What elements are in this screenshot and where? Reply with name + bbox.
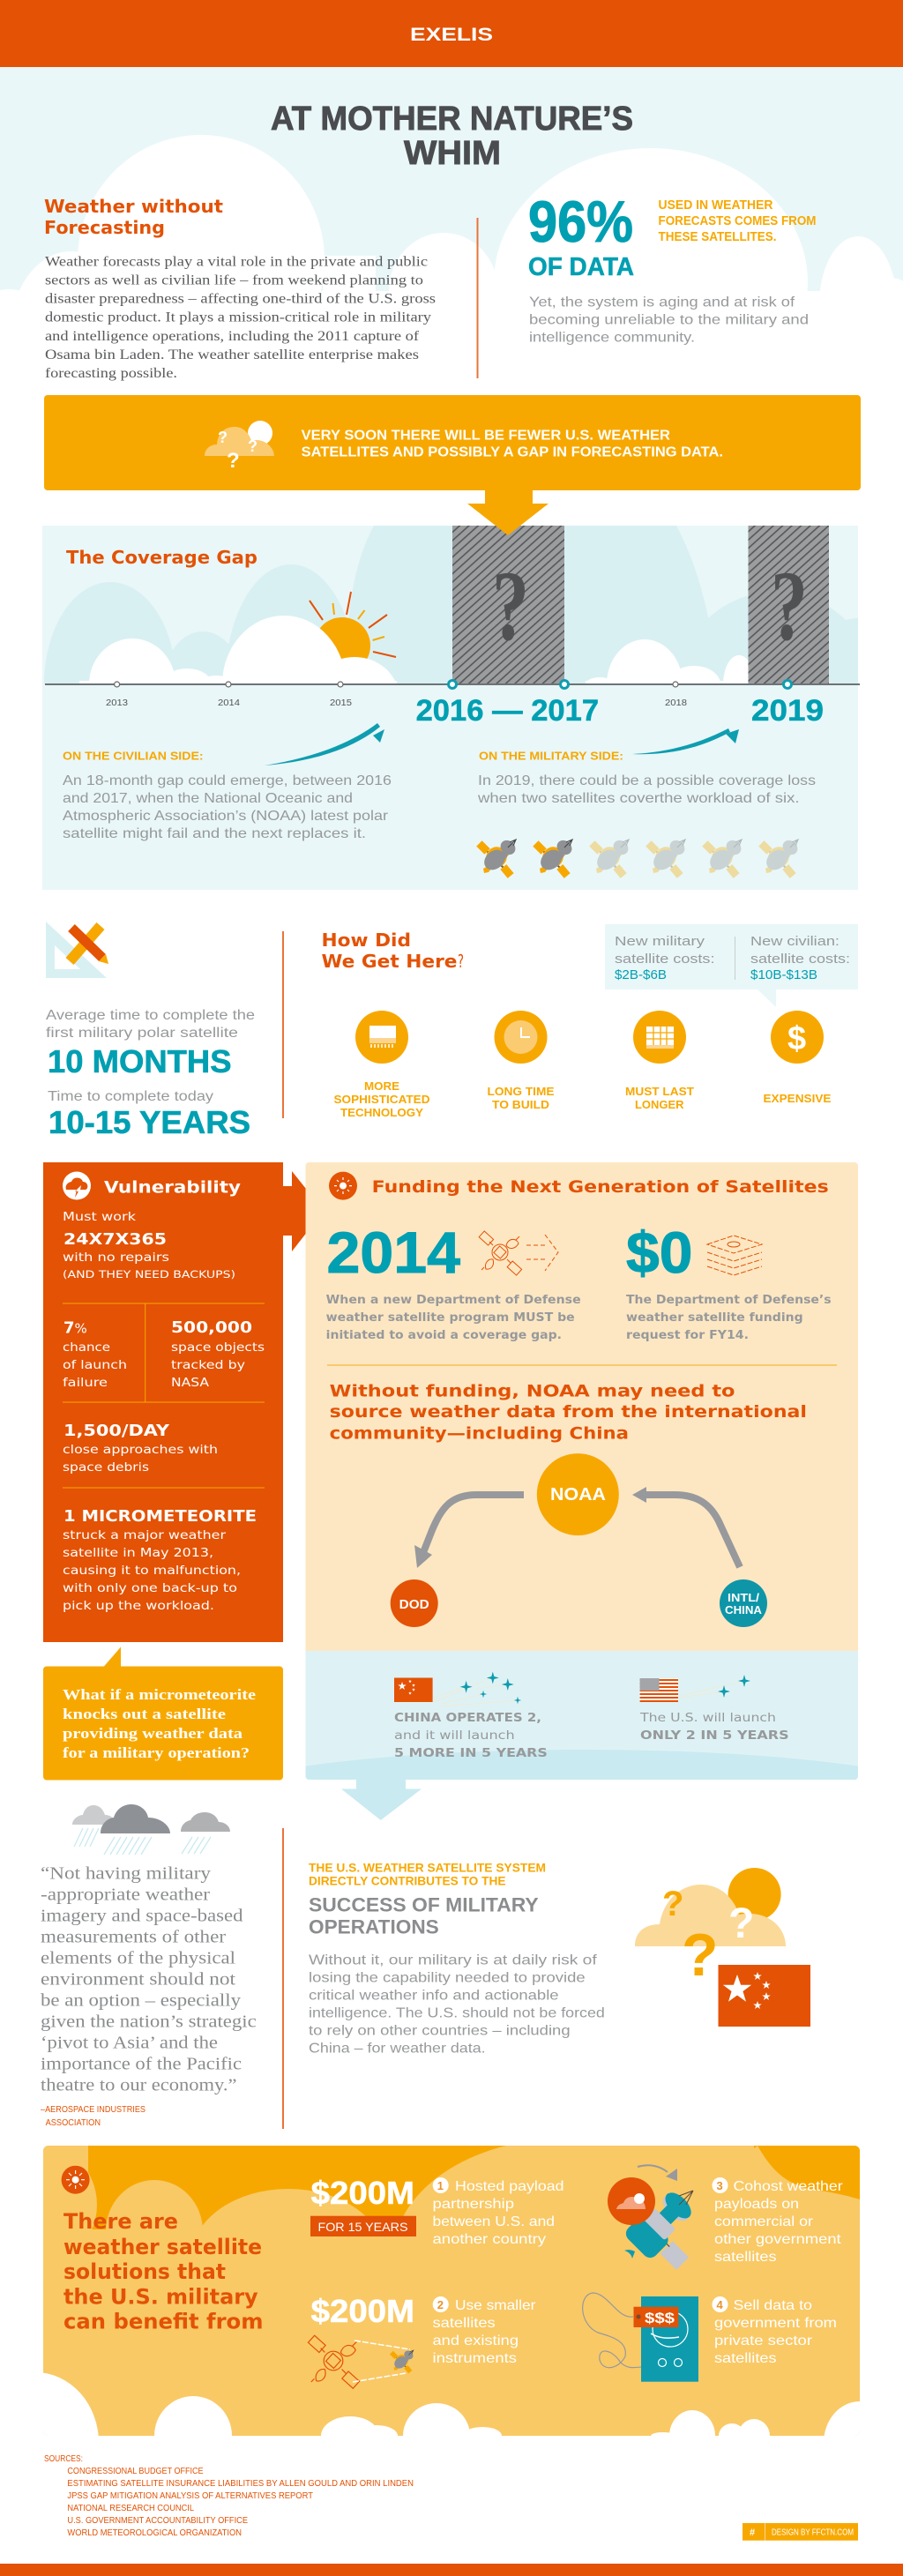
banner: fewer satellites: [44, 395, 861, 535]
solution 4: government from: [714, 2316, 837, 2331]
solution 2: and existing: [432, 2333, 519, 2348]
panel: vulnerability: [43, 1162, 324, 1642]
icon: launch stars: [679, 1675, 750, 1698]
item: must last longer: [625, 1011, 694, 1111]
quote: imagery and space-based: [41, 1908, 243, 1926]
subheading: community—including China: [330, 1423, 629, 1443]
how did we get here: [321, 924, 858, 1119]
node: Intl/China: INTL/: [728, 1591, 759, 1604]
node: NOAA: NOAA: [550, 1485, 606, 1505]
success of military operations: THE U.S. WEATHER SATELLITE SYSTEM: [309, 1861, 546, 1875]
coverage gap panel: [42, 526, 903, 890]
callout: micrometeorite question: knocks out a satellite: [63, 1706, 227, 1722]
panel: launch comparison: [305, 1651, 858, 1820]
solution 1: FOR 15 YEARS: [317, 2220, 407, 2234]
item: more sophisticated technology: TECHNOLOGY: [340, 1106, 423, 1119]
timeline: 2015: [330, 698, 352, 708]
quote: given the nation’s strategic: [41, 2013, 257, 2032]
callout: costs: $10B-$13B: [750, 968, 817, 982]
civilian side text: satellite might fail and the next replaces it.: [63, 826, 366, 841]
icon: storm cloud: [63, 1171, 91, 1199]
quote: ‘pivot to Asia’ and the: [41, 2035, 218, 2053]
stat: 24x7x365: (AND THEY NEED BACKUPS): [63, 1268, 235, 1281]
white clouds: [43, 2372, 860, 2436]
stat: micrometeorite: satellite in May 2013,: [63, 1546, 213, 1560]
build time stats: [46, 1008, 255, 1140]
civilian side text: An 18-month gap could emerge, between 2016: [63, 773, 392, 788]
icon: price tag: $$$: [645, 2310, 675, 2326]
gap column 2016-2017: ?: [492, 551, 529, 661]
node: NOAA: [537, 1453, 619, 1535]
icon: large to small satellite: [308, 2335, 414, 2388]
diagram: data flow: [391, 1453, 767, 1627]
quote: measurements of other: [41, 1929, 227, 1947]
stat: 96% of data: becoming unreliable to the military and: [529, 312, 809, 327]
solution 4: private sector: [714, 2333, 813, 2348]
gap column 2016-2017: [452, 526, 564, 684]
node: DoD: [391, 1579, 438, 1627]
attribution: [41, 2104, 146, 2128]
arrow: civilian: [265, 723, 384, 765]
attribution: –AEROSPACE INDUSTRIES: [41, 2104, 146, 2115]
us launches: ONLY 2 IN 5 YEARS: [640, 1729, 789, 1743]
header bar: [0, 0, 903, 67]
icon: cloud with question marks: [205, 421, 274, 473]
intro: weather without forecasting: [44, 196, 436, 381]
body text: forecasting possible.: [45, 366, 177, 381]
china launches: and it will launch: [394, 1729, 515, 1743]
body text: Osama bin Laden. The weather satellite enterprise makes: [45, 347, 419, 362]
arrow: NOAA to DoD: [414, 1495, 524, 1568]
quote: theatre to our economy.”: [41, 2077, 236, 2095]
sources: NATIONAL RESEARCH COUNCIL: [67, 2503, 194, 2513]
logo: Exelis: EXELIS: [410, 25, 493, 45]
military side text: [477, 750, 816, 806]
heading: Vulnerability: [104, 1178, 242, 1198]
title: AT MOTHER NATURE’S: [271, 101, 633, 138]
civilian side text: [63, 750, 392, 841]
icons: six satellites, two active: [476, 837, 801, 878]
icon: us flag: [640, 1678, 678, 1702]
background shapes: [43, 2146, 860, 2436]
icon: price tag: [583, 2293, 698, 2382]
stat: close approaches: [63, 1422, 218, 1475]
body text: Weather forecasts play a vital role in the private and public: [45, 255, 428, 270]
stat: micrometeorite: 1 MICROMETEORITE: [63, 1507, 257, 1526]
item: more sophisticated technology: [333, 1011, 430, 1119]
civilian side text: ON THE CIVILIAN SIDE:: [63, 750, 204, 763]
banner text: VERY SOON THERE WILL BE FEWER U.S. WEATHER: [302, 429, 670, 444]
stat: micrometeorite: struck a major weather: [63, 1528, 227, 1542]
stat: 2014: weather satellite program MUST be: [326, 1310, 575, 1325]
item: must last longer: MUST LAST: [625, 1085, 694, 1098]
callout: costs: [605, 924, 858, 1007]
icon: satellite outline with arrows: [479, 1231, 558, 1275]
callout: costs: $2B-$6B: [615, 968, 667, 982]
build time stats: Average time to complete the: [46, 1008, 255, 1023]
stat: 2014: When a new Department of Defense: [326, 1293, 581, 1307]
icon: cloud, sun, question marks and china flag: ?: [682, 1922, 719, 1989]
icon: cloud, sun, question marks and china flag: ?: [728, 1900, 754, 1947]
sources: U.S. GOVERNMENT ACCOUNTABILITY OFFICE: [67, 2515, 248, 2526]
body text: sectors as well as civilian life – from weekend planning to: [45, 273, 423, 288]
item: expensive: $: [787, 1020, 806, 1057]
china launches: [394, 1672, 548, 1760]
success of military operations: SUCCESS OF MILITARY: [309, 1894, 539, 1916]
node: Intl/China: [720, 1579, 767, 1627]
gap column 2019: [748, 526, 829, 684]
success of military operations: intelligence. The U.S. should not be forced: [309, 2006, 605, 2021]
sky and clouds background: [0, 67, 903, 428]
heading: There are: [63, 2209, 178, 2234]
sources: JPSS GAP MITIGATION ANALYSIS OF ALTERNATIVES REPORT: [67, 2490, 314, 2501]
heading: solutions that: [63, 2259, 226, 2284]
build time stats: 10 MONTHS: [48, 1043, 231, 1079]
body text: and intelligence operations, including the 2011 capture of: [45, 329, 420, 344]
success of military operations: DIRECTLY CONTRIBUTES TO THE: [309, 1874, 506, 1888]
title: WHIM: [404, 135, 501, 172]
solution 3: commercial or: [714, 2214, 814, 2229]
body text: [45, 255, 436, 381]
quote: environment should not: [41, 1971, 236, 1990]
stat: 96% of data: Yet, the system is aging and at risk of: [529, 295, 795, 310]
callout: micrometeorite question: What if a micrometeorite: [63, 1686, 257, 1703]
subheading: [330, 1382, 807, 1443]
item: must last longer: LONGER: [635, 1098, 684, 1111]
quote: importance of the Pacific: [41, 2056, 242, 2074]
title: [271, 101, 633, 172]
solution 2: Use smaller: [455, 2298, 536, 2313]
arrow: to funding: [283, 1171, 324, 1251]
stat: close approaches: 1,500/DAY: [63, 1422, 170, 1440]
callout: costs: satellite costs:: [750, 952, 850, 967]
stat: space objects: space objects: [171, 1340, 265, 1355]
sources: [44, 2453, 414, 2538]
item: more sophisticated technology: SOPHISTICATED: [333, 1093, 430, 1106]
banner text: [302, 429, 723, 459]
arrow: down: [341, 1780, 422, 1820]
build time stats: first military polar satellite: [46, 1026, 238, 1041]
china launches: 5 MORE IN 5 YEARS: [394, 1746, 548, 1760]
timeline: [45, 681, 860, 728]
success of military operations: Without it, our military is at daily risk of: [309, 1953, 597, 1968]
stat: 96% of data: intelligence community.: [529, 330, 695, 345]
stat: close approaches: close approaches with: [63, 1443, 218, 1457]
timeline: 2013: [106, 698, 128, 708]
us launches: The U.S. will launch: [639, 1711, 776, 1725]
stat: launch failure: 7%: [63, 1319, 87, 1337]
panel: funding the next generation: [305, 1162, 858, 1651]
quote: be an option – especially: [41, 1992, 241, 2011]
solution 1: Hosted payload: [455, 2179, 564, 2194]
callout: costs: satellite costs:: [615, 952, 714, 967]
icon: cloud with question marks: ?: [218, 429, 228, 446]
credit badge: [743, 2523, 858, 2541]
stat: space objects: tracked by: [171, 1358, 245, 1372]
stat: launch failure: failure: [63, 1376, 108, 1390]
quote: “Not having military: [41, 1865, 211, 1884]
stat: space objects: NASA: [171, 1376, 210, 1390]
civilian side text: and 2017, when the National Oceanic and: [63, 791, 353, 806]
timeline: 2019: [751, 694, 824, 728]
item: expensive: EXPENSIVE: [764, 1092, 832, 1105]
white clouds: [79, 616, 748, 683]
credit badge: DESIGN BY FFCTN.COM: [772, 2527, 854, 2538]
solution 3: 3: [716, 2179, 723, 2192]
stat: micrometeorite: [63, 1507, 257, 1613]
heading: [63, 2209, 263, 2334]
gap column 2019: ?: [771, 551, 808, 661]
body text: domestic product. It plays a mission-critical role in military: [45, 310, 431, 325]
military side text: when two satellites coverthe workload of six.: [477, 791, 799, 806]
quote: elements of the physical: [41, 1950, 236, 1968]
build time stats: Time to complete today: [48, 1089, 213, 1104]
callout: micrometeorite question: providing weather data: [63, 1725, 243, 1742]
sources: SOURCES:: [44, 2453, 83, 2464]
stat: 96% of data: THESE SATELLITES.: [658, 230, 776, 244]
heading: The Coverage Gap: [66, 547, 257, 568]
stat: space objects: 500,000: [171, 1318, 252, 1337]
icon: stack of money: [707, 1236, 762, 1275]
icon: cloud with question marks: ?: [227, 449, 240, 473]
stat: micrometeorite: pick up the workload.: [63, 1599, 214, 1613]
stat: launch failure: chance: [63, 1340, 110, 1355]
solution 3: Cohost weather: [734, 2179, 843, 2194]
us launches: [639, 1675, 789, 1743]
solution 1: $200M: [311, 2175, 414, 2211]
callout: micrometeorite question: [43, 1647, 283, 1780]
sources: CONGRESSIONAL BUDGET OFFICE: [67, 2466, 204, 2476]
heading: the U.S. military: [63, 2285, 258, 2310]
heading: Forecasting: [44, 217, 165, 238]
heading: [321, 930, 464, 972]
banner text: SATELLITES AND POSSIBLY A GAP IN FORECASTING DATA.: [302, 444, 723, 459]
heading: [44, 196, 223, 238]
node: DoD: DOD: [399, 1598, 429, 1612]
solution 1: another country: [432, 2232, 546, 2247]
heading: How Did: [321, 930, 411, 951]
solution 4: [583, 2293, 837, 2382]
icon: sun behind cloud: [310, 592, 396, 674]
footer bar: [0, 2564, 903, 2576]
arrow: military: [632, 728, 739, 754]
solution 1: [310, 2175, 564, 2247]
military side text: In 2019, there could be a possible coverage loss: [478, 773, 816, 788]
heading: weather satellite: [63, 2235, 262, 2259]
stat: 24x7x365: [63, 1210, 235, 1281]
build time stats: 10-15 YEARS: [49, 1104, 250, 1140]
solution 3: satellites: [714, 2250, 776, 2265]
icon: cohosted satellite: [608, 2165, 716, 2279]
solution 2: satellites: [432, 2316, 496, 2331]
icon: cloud, sun, question marks and china flag: ?: [662, 1885, 683, 1923]
success of military operations: critical weather info and actionable: [309, 1989, 559, 2004]
solution 2: [308, 2293, 536, 2388]
item: long time to build: TO BUILD: [492, 1098, 549, 1111]
quote: [41, 1865, 257, 2128]
solution 3: [608, 2165, 843, 2279]
success of military operations: losing the capability needed to provide: [309, 1971, 586, 1986]
solution 3: payloads on: [714, 2197, 799, 2212]
success of military operations: [309, 1861, 605, 2057]
icon: launch stars: [434, 1672, 521, 1706]
solution 4: Sell data to: [734, 2298, 812, 2313]
stat: 24x7x365: 24X7X365: [63, 1230, 167, 1249]
timeline: 2018: [665, 698, 687, 708]
stat: 96% of data: OF DATA: [528, 253, 634, 281]
stat: space objects: [171, 1318, 265, 1390]
solution 2: 2: [437, 2298, 444, 2311]
timeline: 2016 — 2017: [416, 694, 599, 728]
stat: launch failure: of launch: [63, 1358, 127, 1372]
icon: cloud, sun, question marks and china flag: [635, 1868, 810, 2027]
credit badge: #: [750, 2527, 755, 2538]
icon: ruler and pencil: [46, 922, 108, 978]
item: more sophisticated technology: MORE: [364, 1079, 399, 1093]
stat: micrometeorite: causing it to malfunction,: [63, 1564, 241, 1578]
icon: sun: [329, 1172, 357, 1200]
heading: Funding the Next Generation of Satellites: [372, 1177, 829, 1197]
item: long time to build: LONG TIME: [487, 1085, 555, 1098]
quote: -appropriate weather: [41, 1886, 211, 1905]
stat: $0: The Department of Defense’s: [626, 1293, 832, 1307]
body text: disaster preparedness – affecting one-third of the U.S. gross: [45, 292, 436, 307]
stat: 2014: initiated to avoid a coverage gap.: [326, 1328, 562, 1342]
solution 4: satellites: [714, 2351, 776, 2366]
item: long time to build: [487, 1011, 555, 1111]
china launches: CHINA OPERATES 2,: [394, 1711, 541, 1725]
stat: 2014: [326, 1220, 581, 1342]
subheading: Without funding, NOAA may need to: [330, 1382, 735, 1401]
callout: micrometeorite question: for a military operation?: [63, 1744, 250, 1761]
item: expensive: [764, 1011, 832, 1105]
icon: cloud with question marks: ?: [248, 437, 257, 455]
stat: close approaches: space debris: [63, 1460, 149, 1475]
subheading: source weather data from the international: [330, 1402, 807, 1422]
solution 1: 1: [437, 2179, 444, 2192]
solution 4: 4: [716, 2298, 723, 2311]
heading: Weather without: [44, 196, 223, 217]
sources: ESTIMATING SATELLITE INSURANCE LIABILITIES BY ALLEN GOULD AND ORIN LINDEN: [67, 2478, 414, 2489]
solution 1: partnership: [432, 2197, 514, 2212]
stat: 96% of data: FORECASTS COMES FROM: [658, 214, 817, 228]
heading: can benefit from: [63, 2310, 263, 2334]
attribution: ASSOCIATION: [46, 2117, 101, 2128]
stat: $0: request for FY14.: [626, 1328, 749, 1342]
military side text: ON THE MILITARY SIDE:: [479, 750, 623, 763]
callout: costs: New military: [615, 935, 705, 949]
solution 3: other government: [714, 2232, 841, 2247]
sources: WORLD METEOROLOGICAL ORGANIZATION: [67, 2527, 242, 2538]
node: Intl/China: CHINA: [725, 1603, 763, 1617]
icon: sun: [62, 2166, 90, 2194]
timeline: 2014: [218, 698, 240, 708]
heading: We Get Here: [321, 951, 457, 972]
success of military operations: China – for weather data.: [309, 2042, 486, 2057]
callout: costs: New civilian:: [750, 935, 840, 949]
stat: 24x7x365: with no repairs: [63, 1251, 169, 1265]
stat: 96% of data: USED IN WEATHER: [658, 198, 773, 213]
stat: 2014: 2014: [326, 1220, 460, 1285]
stat: 96% of data: [528, 189, 817, 345]
icon: china flag: [394, 1677, 433, 1702]
stat: 24x7x365: Must work: [63, 1210, 136, 1224]
stat: micrometeorite: with only one back-up to: [63, 1581, 237, 1595]
stat: $0: $0: [626, 1220, 692, 1285]
solution 2: instruments: [432, 2351, 517, 2366]
heading: ?: [458, 951, 464, 972]
arrow: international to NOAA: [632, 1487, 740, 1567]
success of military operations: to rely on other countries – including: [309, 2024, 571, 2039]
solution 1: between U.S. and: [432, 2214, 555, 2229]
icon: rain clouds: [72, 1804, 230, 1855]
panel: solutions: [43, 2146, 860, 2436]
success of military operations: OPERATIONS: [309, 1916, 439, 1938]
stat: launch failure: [63, 1319, 127, 1390]
background clouds: [44, 526, 858, 684]
solution 2: $200M: [311, 2293, 414, 2329]
stat: 96% of data: 96%: [528, 189, 633, 254]
stat: $0: weather satellite funding: [626, 1310, 803, 1325]
civilian side text: Atmospheric Association’s (NOAA) latest polar: [63, 809, 389, 824]
stat: $0: [626, 1220, 832, 1342]
